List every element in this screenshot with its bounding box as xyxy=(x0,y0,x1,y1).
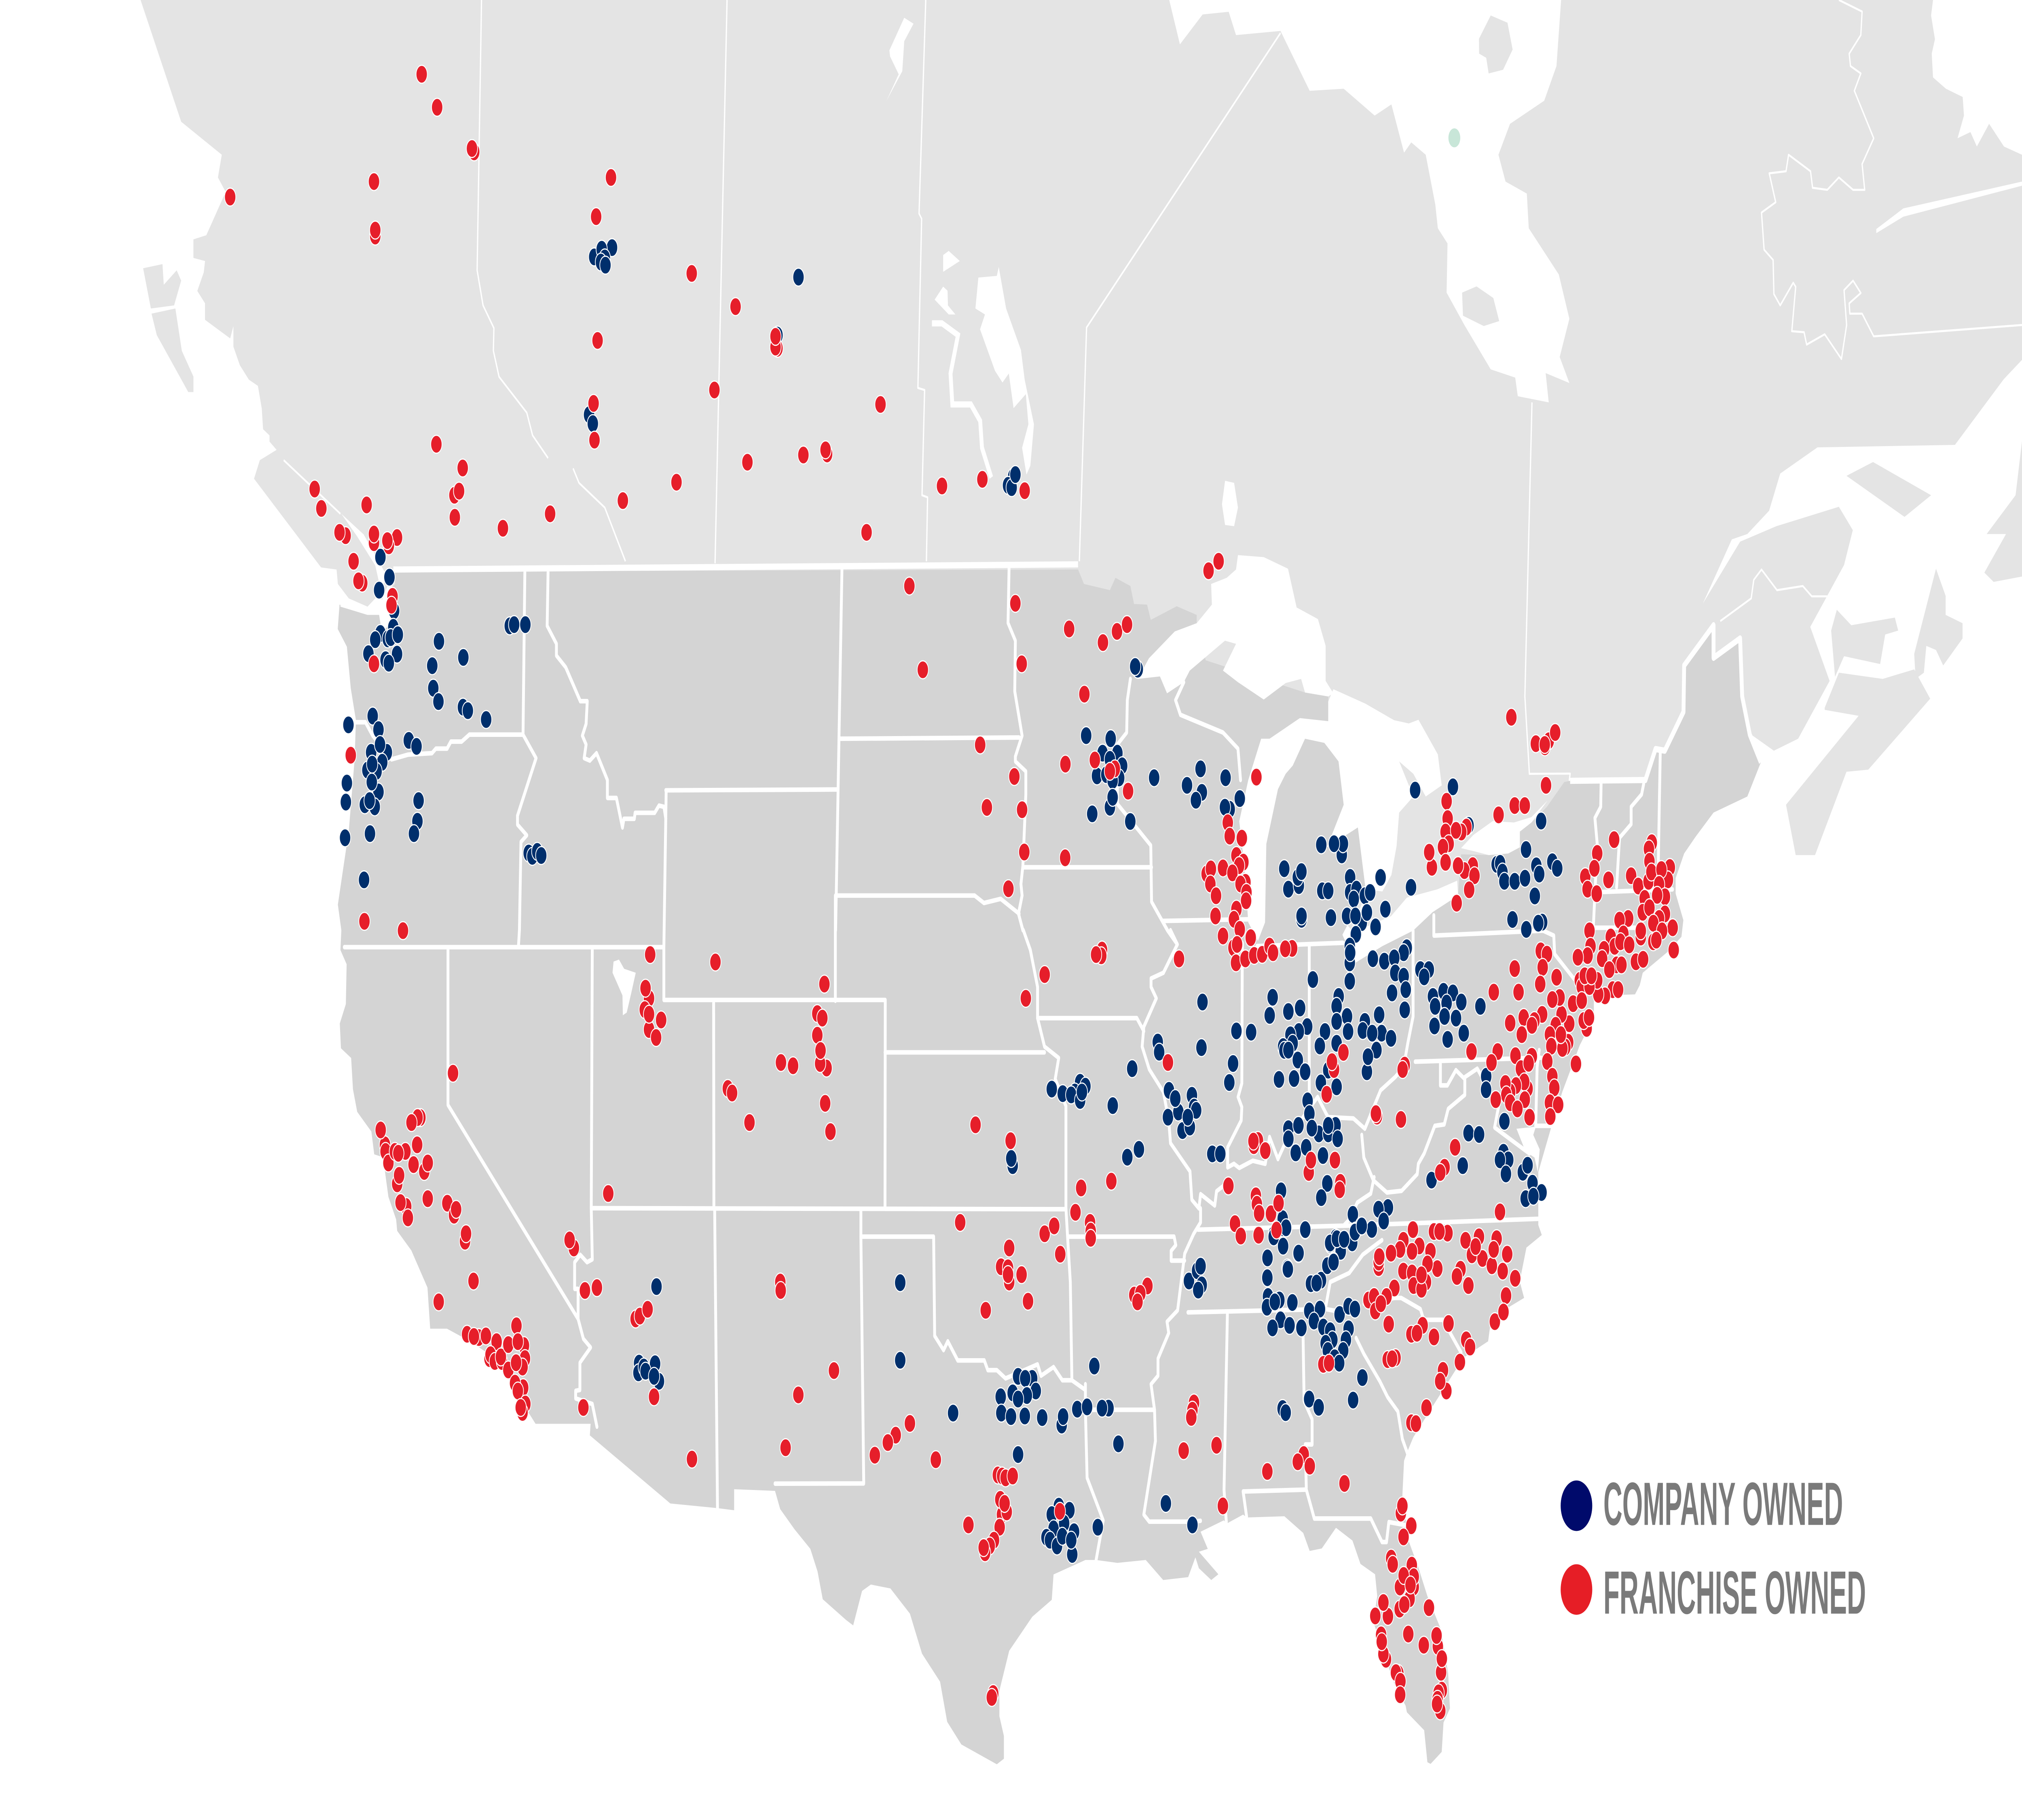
legend item: franchise owned xyxy=(1561,1558,1866,1627)
markers: company owned locations xyxy=(339,239,1563,1564)
map: Canada landmass xyxy=(141,0,2022,949)
legend item: company owned xyxy=(1561,1470,1843,1538)
legend xyxy=(1561,1470,1866,1627)
map: United States landmass xyxy=(338,569,1761,1764)
legend item: company owned: COMPANY OWNED xyxy=(1603,1470,1843,1538)
map: US state and national borders xyxy=(344,564,1761,1560)
map: Canada internal province lines xyxy=(477,0,2022,781)
map: lakes and inland water xyxy=(284,18,2022,1172)
legend item: franchise owned: FRANCHISE OWNED xyxy=(1603,1558,1866,1627)
markers: franchise owned locations xyxy=(224,65,1679,1720)
